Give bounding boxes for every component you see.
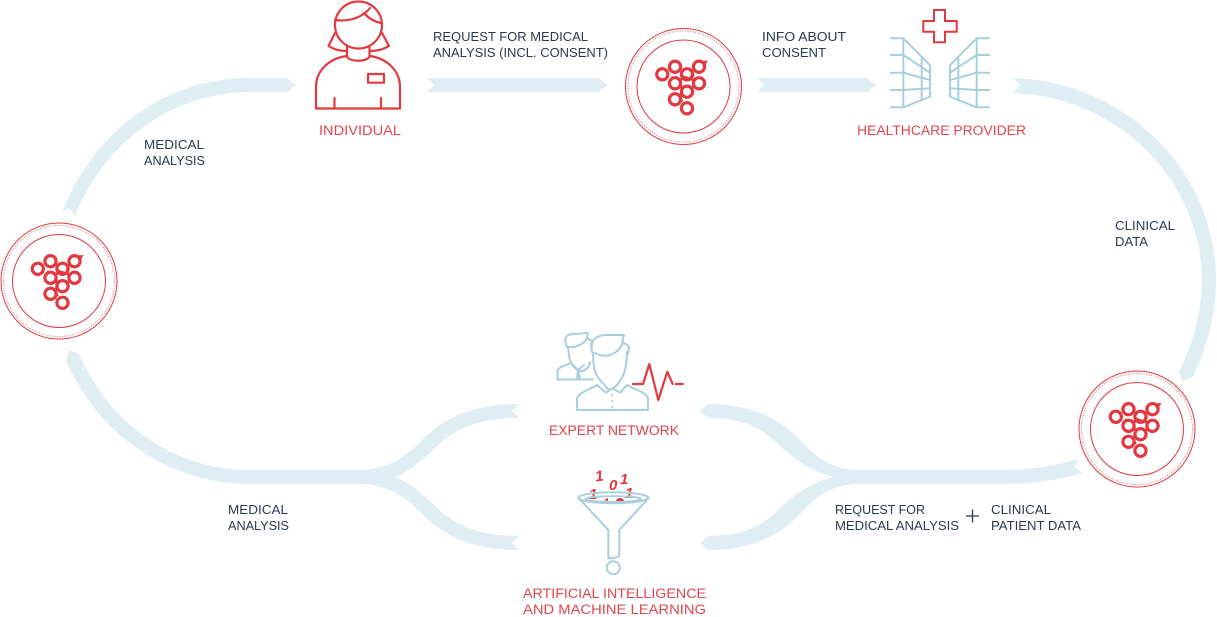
badge: left — [1, 223, 117, 339]
label: request for medical analysis: ANALYSIS (INCL. CONSENT) — [433, 45, 608, 60]
label: request for medical analysis lower: MEDICAL ANALYSIS — [835, 518, 959, 533]
icon: binary digits — [589, 467, 633, 503]
label: clinical data: DATA — [1115, 234, 1148, 249]
icon: right building — [950, 38, 990, 107]
label: request for medical analysis lower — [835, 502, 959, 533]
arrow: consent to healthcare provider — [757, 78, 876, 92]
label: medical analysis lower: ANALYSIS — [228, 518, 289, 533]
label: info about consent — [762, 29, 846, 60]
icon: plus sign — [966, 510, 979, 522]
label: medical analysis upper left: MEDICAL — [144, 137, 204, 152]
icon: expert network — [558, 333, 683, 410]
icon: front person — [577, 335, 648, 410]
icon: digits dropping in funnel — [604, 498, 624, 501]
icon: red cross — [923, 10, 957, 42]
label: expert network: EXPERT NETWORK — [549, 423, 679, 438]
badge: top — [626, 28, 742, 144]
label: clinical patient data: CLINICAL — [991, 502, 1051, 517]
icon: funnel outline — [578, 492, 648, 574]
icon: binary digits: 1 — [589, 486, 597, 503]
label: clinical data: CLINICAL — [1115, 218, 1175, 233]
icon: binary digits: 1 — [594, 467, 605, 485]
icon: left building — [890, 38, 930, 107]
icon: binary digits: 1 — [620, 471, 628, 488]
icon: pulse line — [633, 364, 683, 400]
arrow: healthcare provider to clinical badge — [1013, 78, 1216, 381]
icon: healthcare provider — [890, 10, 990, 107]
label: artificial intelligence and machine learning — [523, 586, 706, 617]
icon: data funnel — [578, 467, 648, 574]
label: medical analysis lower: MEDICAL — [228, 502, 288, 517]
label: artificial intelligence and machine learning: ARTIFICIAL INTELLIGENCE — [523, 586, 706, 601]
icon: binary digits: 1 — [625, 485, 633, 502]
label: artificial intelligence and machine learning: AND MACHINE LEARNING — [523, 602, 706, 617]
icon: binary digits: 0 — [609, 477, 618, 494]
arrow: individual to request badge — [427, 78, 608, 92]
label: request for medical analysis lower: REQUEST FOR — [835, 502, 925, 517]
badge: right — [1079, 371, 1195, 487]
icon: back person — [558, 333, 593, 380]
label: info about consent: INFO ABOUT — [762, 29, 846, 44]
label: request for medical analysis: REQUEST FOR MEDICAL — [433, 29, 588, 44]
label: medical analysis upper left: ANALYSIS — [144, 153, 205, 168]
arrow: forked return flow to left badge — [66, 350, 520, 550]
label: medical analysis upper left — [144, 137, 205, 168]
label: clinical data — [1115, 218, 1175, 249]
arrow: forked flow from clinical badge — [700, 404, 1083, 550]
label: clinical patient data — [991, 502, 1081, 533]
arrow: individual to analysis badge left — [62, 78, 296, 216]
label: clinical patient data: PATIENT DATA — [991, 518, 1081, 533]
label: healthcare provider: HEALTHCARE PROVIDER — [857, 123, 1026, 138]
label: info about consent: CONSENT — [762, 45, 826, 60]
icon: individual — [316, 2, 400, 108]
label: request for medical analysis — [433, 29, 608, 60]
label: medical analysis lower — [228, 502, 289, 533]
label: individual: INDIVIDUAL — [319, 123, 402, 138]
